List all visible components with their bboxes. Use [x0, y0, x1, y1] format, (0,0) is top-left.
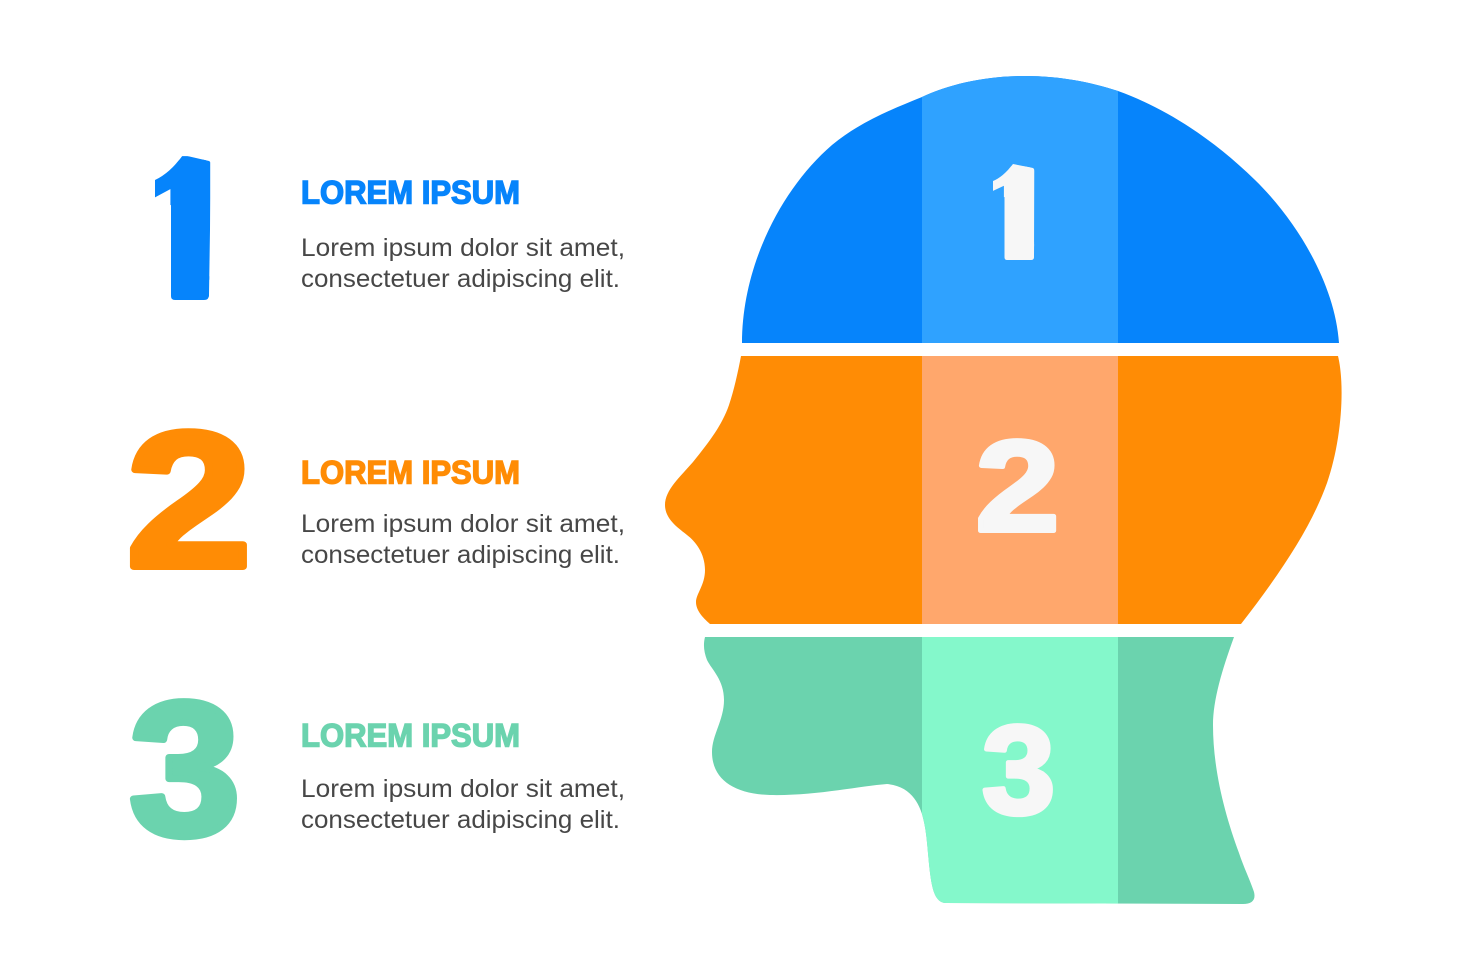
heading 2: LOREM IPSUM	[301, 454, 520, 490]
body text 2	[301, 510, 625, 569]
heading 3: LOREM IPSUM	[301, 718, 520, 754]
body text 3: Lorem ipsum dolor sit amet,	[301, 775, 625, 803]
number 3: 3	[129, 663, 241, 876]
heading 1: LOREM IPSUM	[301, 174, 520, 210]
head segment 2: orange face: 2	[975, 413, 1060, 558]
body text 1: consectetuer adipiscing elit.	[301, 265, 620, 293]
head segment 1: blue crown	[742, 70, 1339, 350]
body text 3: consectetuer adipiscing elit.	[301, 806, 620, 834]
number 2: 2	[126, 392, 252, 608]
head segment 1: blue crown: 1	[966, 138, 1064, 287]
head segment 3: green jaw and neck	[704, 630, 1255, 910]
body text 3	[301, 775, 625, 834]
body text 1: Lorem ipsum dolor sit amet,	[301, 234, 625, 262]
body text 2: Lorem ipsum dolor sit amet,	[301, 510, 625, 538]
body text 2: consectetuer adipiscing elit.	[301, 541, 620, 569]
body text 1	[301, 234, 625, 293]
head segment 3: green jaw and neck: 3	[982, 700, 1055, 841]
head segment 2: orange face	[665, 350, 1342, 630]
number 1: 1	[121, 116, 249, 339]
